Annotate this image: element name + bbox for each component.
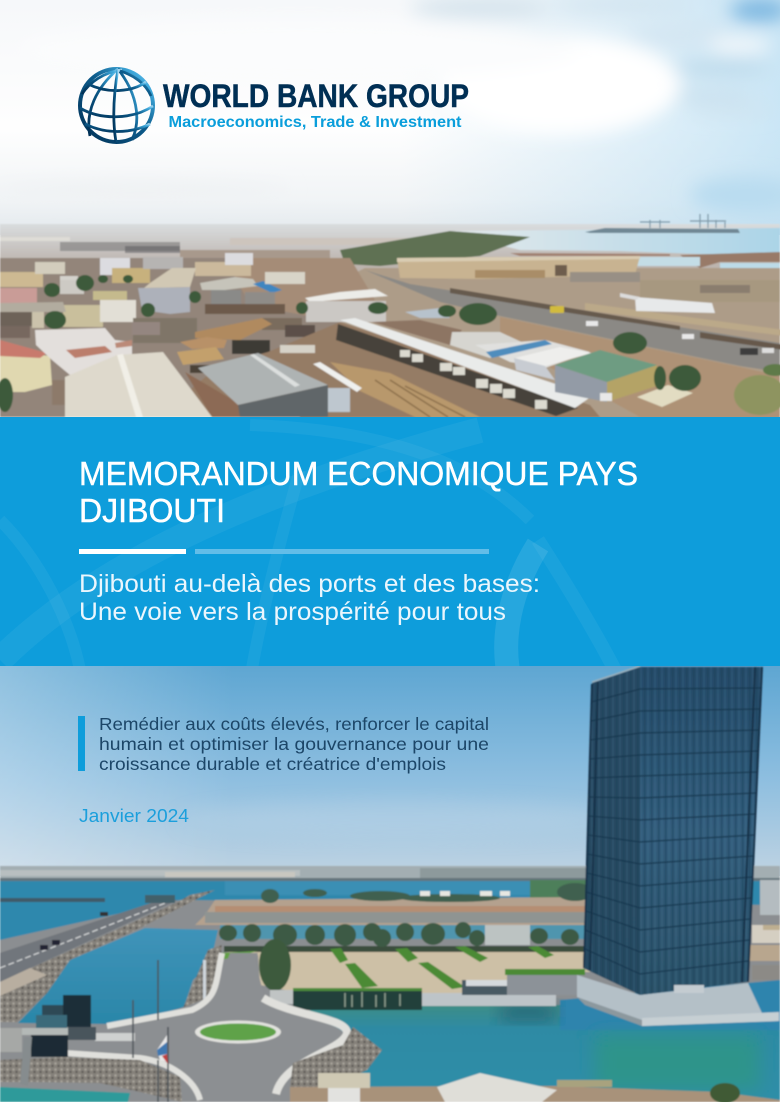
photo: glass tower and waterfront in Djibouti (0, 666, 780, 1102)
grey shed (198, 353, 328, 405)
dark machinery ground (262, 318, 302, 330)
subtitle: Djibouti au-delà des ports et des bases: (79, 570, 540, 598)
roofs near blue canopy (200, 277, 258, 290)
icon: globe (80, 69, 153, 142)
hedges (330, 946, 585, 989)
description text: humain et optimiser la gouvernance pour une (99, 734, 489, 754)
buildings behind shed (372, 320, 462, 345)
far water (0, 881, 780, 941)
title (79, 455, 638, 529)
dark garden wall (293, 990, 422, 1010)
yard ground (300, 268, 780, 420)
white villa (35, 328, 132, 375)
title: DJIBOUTI (79, 492, 225, 529)
road on causeway (0, 900, 178, 982)
large white warehouse (65, 352, 212, 417)
left lagoon (18, 928, 218, 1024)
pink-roofed cream building (0, 350, 52, 392)
description text: Remédier aux coûts élevés, renforcer le capital (99, 714, 489, 734)
description text (99, 714, 489, 774)
sky (0, 666, 780, 876)
divider bars (79, 549, 489, 554)
left bottom water (0, 1087, 130, 1102)
date: Janvier 2024 (79, 806, 189, 826)
main road (365, 270, 780, 372)
parked vans under long shed (336, 324, 578, 416)
main sea (310, 1005, 780, 1102)
photo: aerial view of Djibouti port district under a cloudy sky (0, 0, 780, 420)
platform of tower (577, 975, 779, 1026)
town blocks (0, 272, 43, 287)
road and roundabout (0, 953, 345, 1102)
dark security blocks (63, 995, 91, 1027)
thin water behind palms (220, 925, 585, 939)
sky with clouds (0, 0, 780, 235)
wordmark: WORLD BANK GROUP (163, 78, 469, 114)
subtitle: Une voie vers la prospérité pour tous (79, 598, 506, 626)
rock edge (183, 945, 222, 1010)
grass (220, 951, 258, 960)
base ground (0, 900, 780, 1102)
grey building with beige roof (138, 287, 190, 314)
trees (0, 275, 701, 412)
far land strip (195, 897, 590, 925)
rock mounds (290, 1027, 382, 1087)
logo: World Bank Group (80, 69, 469, 142)
small canopy (637, 385, 693, 407)
yard dirt (180, 322, 600, 417)
flags and poles (133, 960, 168, 1102)
panel: blue title band (0, 417, 780, 680)
waterfront scene (0, 666, 780, 1102)
buildings right of tower (752, 925, 780, 943)
left town ground (0, 258, 340, 417)
pale wall and railing (422, 993, 556, 1006)
land and buildings (0, 214, 780, 420)
sub-brand: Macroeconomics, Trade & Investment (168, 114, 462, 131)
dirt strip (500, 317, 780, 417)
wooden sheds left (195, 318, 272, 340)
palm row (224, 946, 590, 952)
white building near yard (305, 289, 388, 302)
long white shed roof (340, 318, 592, 408)
tall tree (259, 939, 291, 991)
plaza (225, 950, 590, 994)
title: MEMORANDUM ECONOMIQUE PAYS (79, 455, 638, 492)
accent bar (78, 716, 85, 771)
wooden roof and strip (330, 362, 480, 417)
decorative globe watermark (0, 425, 620, 680)
glass tower (583, 667, 640, 995)
description text: croissance durable et créatrice d'emplois (99, 754, 446, 774)
green-roofed building (555, 365, 607, 402)
lower jetty, huts and roof (290, 1086, 780, 1102)
subtitle (79, 570, 540, 626)
